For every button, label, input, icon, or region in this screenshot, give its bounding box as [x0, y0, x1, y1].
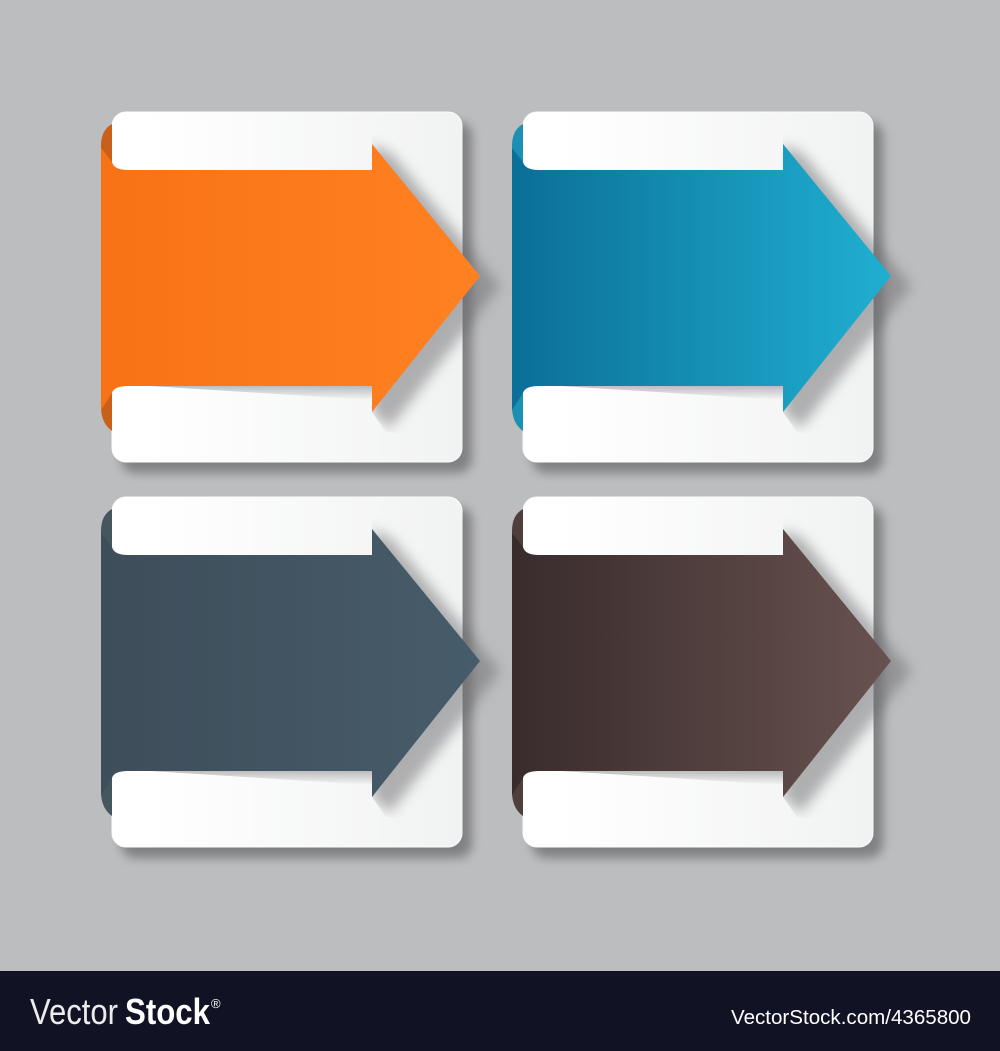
footer logo: Stock	[125, 991, 211, 1032]
top fold	[101, 124, 112, 167]
card	[523, 112, 873, 462]
card	[523, 497, 873, 847]
bottom fold	[512, 392, 523, 431]
footer image id: VectorStock.com/4365800	[731, 1007, 971, 1029]
panel: slate arrow card	[101, 497, 500, 858]
top fold	[512, 124, 523, 167]
arrow	[512, 529, 891, 797]
panel: brown arrow card	[512, 497, 911, 858]
arrow	[101, 144, 480, 412]
footer bar	[0, 971, 1000, 1051]
card	[112, 497, 462, 847]
footer logo: ®	[211, 996, 221, 1011]
top fold	[101, 509, 112, 552]
arrow	[101, 529, 480, 797]
footer logo: Vector	[30, 991, 118, 1032]
top fold	[512, 509, 523, 552]
panel: blue arrow card	[512, 112, 911, 473]
panel: orange arrow card	[101, 112, 500, 473]
footer logo	[30, 991, 221, 1032]
bottom fold	[101, 777, 112, 816]
bottom fold	[101, 392, 112, 431]
bottom fold	[512, 777, 523, 816]
arrow	[512, 144, 891, 412]
card	[112, 112, 462, 462]
